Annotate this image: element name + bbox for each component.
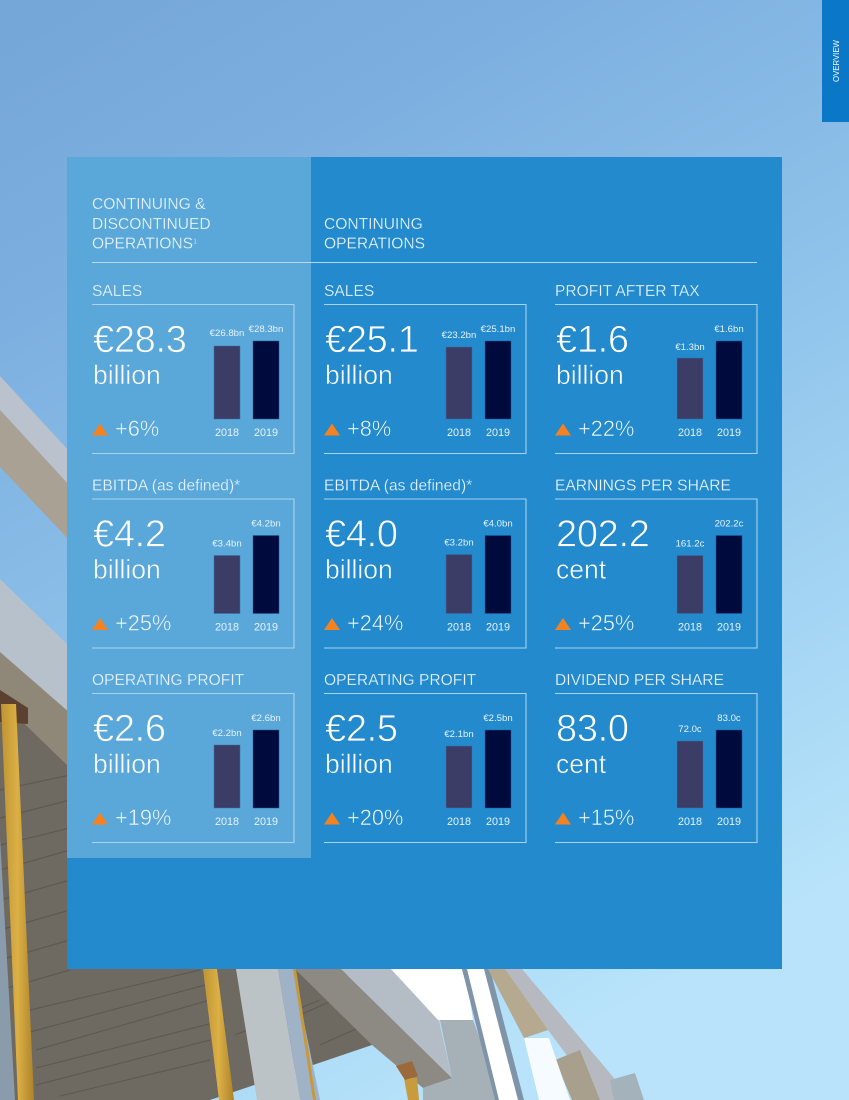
small corner column: [610, 1073, 644, 1100]
bar chart: [210, 324, 283, 439]
panel: sales, continuing and discontinued: [92, 283, 294, 454]
card title: DIVIDEND PER SHARE: [555, 672, 724, 689]
panel: EBITDA, continuing and discontinued: [92, 478, 294, 648]
card title: EBITDA (as defined)*: [324, 478, 472, 494]
headline value: €4.2: [93, 514, 166, 556]
bar chart: 2019: [717, 816, 741, 828]
right beam: [488, 969, 614, 1100]
bar chart: €2.1bn: [444, 729, 474, 740]
change percentage: +6%: [115, 416, 159, 441]
heading: continuing and discontinued operations: CONTINUING &: [92, 196, 206, 213]
bar chart: 2019: [254, 816, 278, 828]
icon: up triangle: [324, 618, 340, 630]
heading: continuing and discontinued operations: DISCONTINUED: [92, 216, 211, 233]
card title: EBITDA (as defined)*: [92, 478, 240, 494]
heading: continuing and discontinued operations: 1: [193, 238, 197, 246]
yellow pole middle: [203, 969, 234, 1100]
card frame: [555, 499, 757, 648]
bar chart: 2018: [678, 622, 702, 634]
panel: continuing and discontinued highlight: [67, 157, 311, 858]
card frame: [324, 694, 526, 842]
bar chart: €2.5bn: [483, 713, 513, 724]
bar chart: €2.2bn: [212, 728, 242, 739]
large column: [236, 969, 320, 1100]
bar chart: 2018: [215, 816, 239, 828]
headline value: €4.0: [325, 514, 398, 556]
change percentage: +25%: [115, 610, 171, 636]
bar chart: 2019: [717, 622, 741, 634]
icon: up triangle: [92, 812, 108, 824]
bar chart: €3.4bn: [212, 538, 242, 550]
bar chart: 2018: [447, 622, 471, 634]
card frame: [555, 694, 757, 842]
change percentage: +15%: [578, 805, 634, 830]
unit: billion: [93, 749, 161, 779]
bar chart: [444, 713, 513, 828]
grey column: [423, 1020, 502, 1100]
bar chart: 2019: [486, 427, 510, 439]
unit: billion: [325, 360, 393, 390]
change percentage: +24%: [347, 610, 403, 636]
bar chart: €4.0bn: [483, 518, 513, 530]
change percentage: +20%: [347, 805, 403, 830]
bar chart: 2018: [447, 816, 471, 828]
bar chart: 202.2c: [715, 518, 744, 530]
rust bracket: [0, 690, 28, 724]
bar chart: 2019: [254, 622, 278, 634]
white window: [391, 969, 473, 1020]
card title: OPERATING PROFIT: [324, 672, 477, 689]
bar chart: [212, 713, 281, 828]
headline value: 83.0: [556, 708, 629, 750]
bar chart: 2018: [678, 816, 702, 828]
bar chart: €2.6bn: [251, 713, 281, 724]
change percentage: +19%: [115, 805, 171, 830]
bar chart: €26.8bn: [210, 328, 244, 339]
heading: continuing and discontinued operations: OPERATIONS: [92, 236, 193, 252]
tab: section marker: [822, 0, 849, 122]
card frame: [92, 694, 294, 842]
diagonal beam: [295, 969, 452, 1088]
panel: operating profit, continuing: [324, 672, 526, 842]
bar chart: €1.3bn: [675, 342, 705, 353]
background photo: concrete building structure: [0, 376, 644, 1100]
bar chart: 2018: [215, 427, 239, 439]
bar chart: 2019: [717, 427, 741, 439]
heading: continuing operations: CONTINUING: [324, 216, 423, 233]
bar chart: €28.3bn: [249, 324, 283, 335]
bar chart: €25.1bn: [481, 324, 515, 335]
yellow pole left: [1, 704, 34, 1100]
rust bracket and thin pole: [396, 1061, 419, 1100]
white strip: [462, 969, 524, 1100]
headline value: €2.5: [325, 708, 398, 750]
icon: up triangle: [324, 424, 340, 436]
unit: billion: [556, 360, 624, 390]
bar chart: €23.2bn: [442, 330, 476, 341]
unit: billion: [93, 360, 161, 390]
panel: dividend per share: [555, 672, 757, 842]
card frame: [324, 499, 526, 648]
card frame: [555, 304, 757, 454]
unit: billion: [325, 749, 393, 779]
card title: EARNINGS PER SHARE: [555, 478, 731, 494]
bar chart: 2018: [678, 427, 702, 439]
change percentage: +25%: [578, 610, 634, 636]
bar chart: [444, 518, 513, 634]
white window right: [524, 1038, 570, 1100]
card title: SALES: [92, 283, 142, 300]
icon: up triangle: [555, 618, 571, 630]
concrete ceiling: [0, 650, 372, 1100]
panel: main blue background: [67, 157, 782, 969]
bar chart: [675, 324, 744, 439]
unit: billion: [93, 554, 161, 584]
bar chart: €3.2bn: [444, 538, 474, 548]
headline value: €1.6: [556, 319, 629, 361]
panel: earnings per share: [555, 478, 757, 648]
divider under headings: [92, 262, 757, 263]
tab label: OVERVIEW: [832, 39, 841, 82]
unit: billion: [325, 554, 393, 584]
lower concrete beam: [0, 579, 70, 713]
icon: up triangle: [92, 424, 108, 436]
icon: up triangle: [324, 812, 340, 824]
bar chart: €1.6bn: [714, 324, 744, 335]
unit: cent: [556, 554, 607, 584]
icon: up triangle: [555, 812, 571, 824]
panel: sales, continuing: [324, 283, 526, 454]
bar chart: 2018: [215, 622, 239, 634]
panel: operating profit, continuing and discontinued: [92, 672, 294, 842]
bar chart: [677, 713, 742, 828]
bar chart: 161.2c: [676, 538, 705, 550]
panel: profit after tax: [555, 283, 757, 454]
headline value: €28.3: [93, 319, 187, 361]
unit: cent: [556, 749, 607, 779]
card frame: [324, 304, 526, 454]
icon: up triangle: [555, 424, 571, 436]
icon: up triangle: [92, 618, 108, 630]
heading: continuing operations: OPERATIONS: [324, 236, 425, 252]
headline value: €2.6: [93, 708, 166, 750]
bar chart: [212, 518, 281, 634]
headline value: €25.1: [325, 319, 419, 361]
bar chart: €4.2bn: [251, 518, 281, 530]
card frame: [92, 499, 294, 648]
change percentage: +8%: [347, 416, 391, 441]
blue-grey column left: [0, 838, 15, 1100]
bar chart: 2018: [447, 427, 471, 439]
bar chart: 83.0c: [717, 713, 741, 724]
bar chart: 2019: [486, 622, 510, 634]
bar chart: 72.0c: [678, 724, 702, 735]
card title: PROFIT AFTER TAX: [555, 283, 700, 300]
panel: EBITDA, continuing: [324, 478, 526, 648]
card title: SALES: [324, 283, 374, 300]
headline value: 202.2: [556, 514, 650, 556]
change percentage: +22%: [578, 416, 634, 441]
bar chart: [442, 324, 515, 439]
bar chart: 2019: [486, 816, 510, 828]
bar chart: [676, 518, 744, 634]
card title: OPERATING PROFIT: [92, 672, 245, 689]
upper concrete beam: [0, 376, 70, 541]
bar chart: 2019: [254, 427, 278, 439]
card frame: [92, 304, 294, 454]
